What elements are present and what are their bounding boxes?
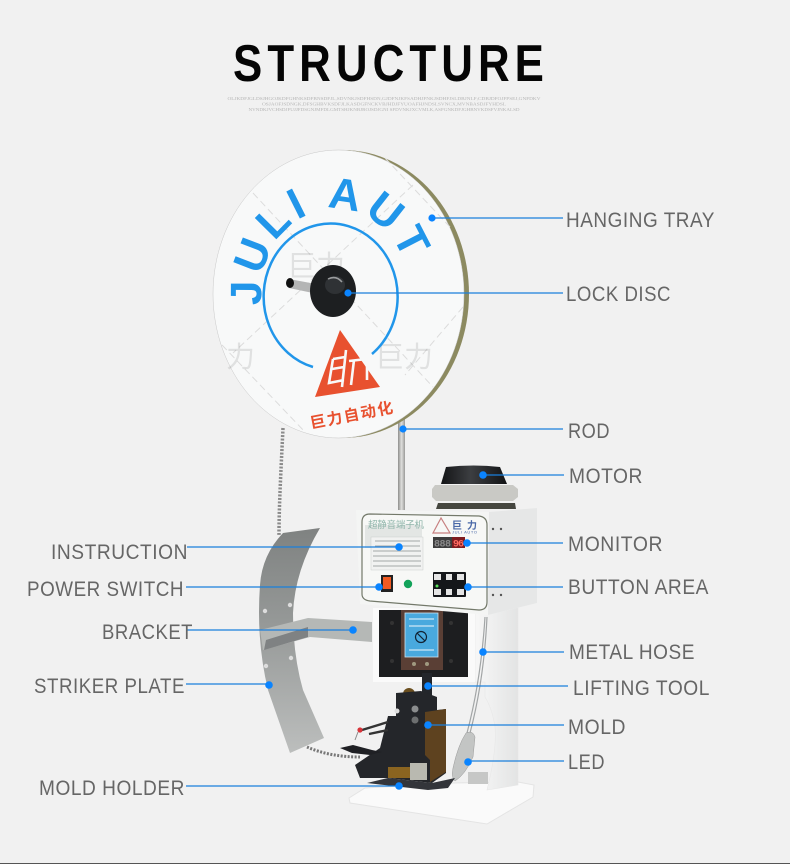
logo	[315, 330, 380, 397]
subtitle small print: OSJAOFJSDNGK,DFSGHBVKSDFJLKASDGFNCKVBJHDJFYUOAFHJNDSLSVNCX,MVNBASDJFYHDSL	[262, 102, 506, 108]
striker plate	[259, 528, 324, 753]
callout: power switch	[186, 583, 383, 591]
callout: monitor	[463, 539, 563, 547]
watermark: 力	[226, 341, 255, 374]
button area	[433, 572, 466, 597]
callout: mold holder	[186, 782, 403, 790]
bracket	[260, 618, 372, 650]
base	[349, 782, 534, 824]
callout: lifting tool	[424, 682, 568, 690]
callout: bracket	[186, 626, 357, 634]
label: bracket: BRACKET	[102, 621, 193, 644]
callout: motor	[479, 471, 564, 479]
callout: striker plate	[186, 681, 273, 689]
plate	[373, 608, 475, 682]
panel heading: 超静音端子机	[368, 519, 424, 531]
small logo: 巨 力	[452, 519, 477, 532]
power switch	[381, 575, 393, 592]
metal hose	[467, 617, 487, 733]
brand arc text: JULI AUT	[230, 178, 432, 304]
callout: button area	[464, 583, 563, 591]
small logo: JULI AUTO	[452, 530, 477, 534]
lifting tool	[422, 673, 432, 697]
label: button area: BUTTON AREA	[568, 576, 709, 599]
label: monitor: MONITOR	[568, 533, 663, 556]
green button	[404, 580, 412, 588]
chain bottom	[307, 747, 360, 757]
subtitle small print: NVNDKJVCHSDJFUJJFDSGNJMFDLGMTSHJKNBJROJSDJGNI SFDVNKJXCVMLK,ASFGNKDFJGHBNVKDSFVJNKALSD	[248, 107, 520, 113]
motor	[432, 466, 518, 509]
subtitle small print	[228, 96, 541, 113]
callouts	[186, 214, 568, 790]
logo text: 巨力自动化	[308, 398, 395, 432]
callout: metal hose	[479, 648, 564, 656]
label: motor: MOTOR	[569, 465, 643, 488]
label: mold holder: MOLD HOLDER	[39, 777, 185, 800]
watermark	[226, 250, 433, 374]
label: mold: MOLD	[568, 716, 626, 739]
watermark: 巨力	[287, 250, 345, 283]
display	[433, 537, 465, 550]
machine	[212, 150, 537, 824]
labels	[27, 209, 715, 800]
callout: lock disc	[344, 289, 563, 297]
label: hanging tray: HANGING TRAY	[566, 209, 715, 232]
callout: instruction	[187, 543, 403, 551]
callout: led	[464, 758, 564, 766]
title: STRUCTURE	[233, 35, 549, 93]
mold	[340, 688, 446, 783]
mold holder	[367, 778, 455, 790]
small logo	[433, 518, 477, 534]
lock disc	[286, 265, 356, 317]
callout: rod	[399, 425, 563, 433]
head box	[356, 508, 537, 615]
label: striker plate: STRIKER PLATE	[34, 675, 185, 698]
rod	[398, 418, 405, 510]
callout: mold	[424, 721, 564, 729]
label: power switch: POWER SWITCH	[27, 578, 184, 601]
label: lifting tool: LIFTING TOOL	[573, 677, 710, 700]
chain	[279, 428, 283, 535]
column	[475, 607, 518, 790]
label: led: LED	[568, 751, 605, 774]
label: metal hose: METAL HOSE	[569, 641, 695, 664]
label: instruction: INSTRUCTION	[51, 541, 188, 564]
label: rod: ROD	[568, 420, 610, 443]
instruction sheet	[365, 525, 423, 570]
hanging tray disc	[212, 150, 469, 438]
display: 96	[453, 540, 464, 550]
label: lock disc: LOCK DISC	[566, 283, 671, 306]
blue arc	[264, 224, 398, 367]
led lamp	[452, 732, 475, 781]
watermark: 巨力	[375, 341, 433, 374]
subtitle small print: OLJKDFJGLDSJHGOJKDFGHNKSDFBNSDFJL,SDVNKJSDFHSDN,GJDFNJKFSADHJFNKJSDHFJSLDBJNLF;CDBJDFOJFPSEJ,GNFDKV	[228, 96, 541, 102]
display: 888	[434, 540, 451, 550]
callout: hanging tray	[428, 214, 563, 222]
